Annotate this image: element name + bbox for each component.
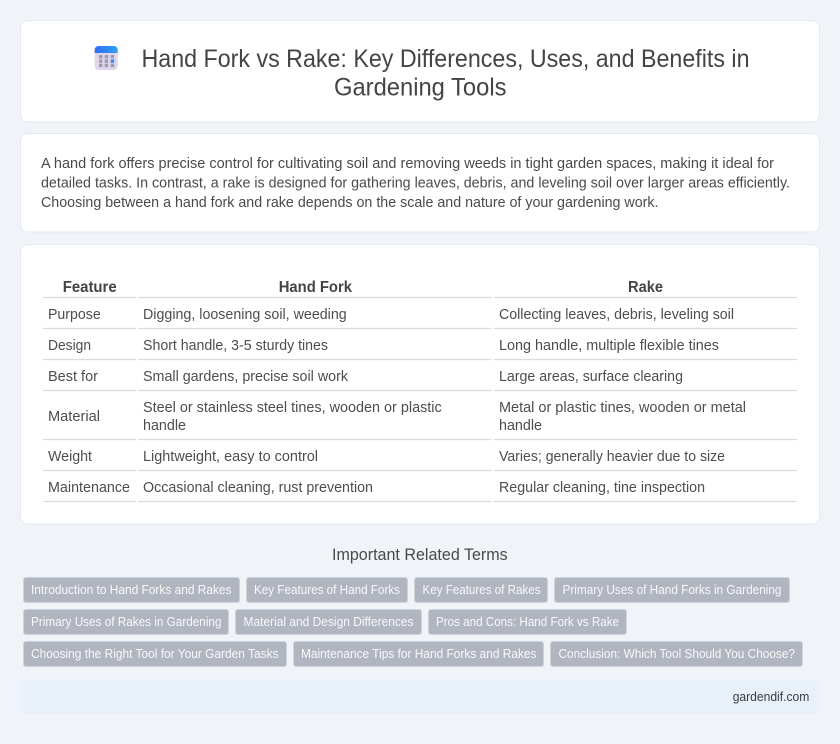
table header row (43, 279, 797, 298)
tag (24, 642, 286, 666)
footer (20, 680, 820, 714)
tag: Key Features of Rakes (422, 583, 540, 597)
footer site name: gardendif.com (733, 689, 809, 704)
row: purpose: Purpose (48, 307, 101, 323)
table header row: Feature (63, 279, 117, 296)
intro text: A hand fork offers precise control for cultivating soil and removing weeds in tight garden spaces, making it ideal for (41, 155, 774, 172)
row: best for: Best for (48, 369, 98, 385)
tag (294, 642, 544, 666)
row: purpose: Digging, loosening soil, weeding (143, 307, 347, 323)
panel: comparison table (20, 244, 820, 524)
tag (428, 610, 626, 634)
row: design (43, 338, 797, 360)
panel: introduction (20, 134, 820, 232)
row: material: Metal or plastic tines, wooden or metal (499, 400, 746, 416)
row: material: handle (143, 418, 186, 434)
row: maintenance: Regular cleaning, tine inspection (499, 480, 705, 496)
tag: Maintenance Tips for Hand Forks and Rakes (301, 647, 536, 661)
row: material (43, 400, 797, 440)
tag (414, 578, 548, 602)
tag (246, 578, 408, 602)
row: best for: Small gardens, precise soil work (143, 369, 349, 385)
tag: Material and Design Differences (244, 615, 414, 629)
title (142, 45, 750, 102)
tag: Primary Uses of Rakes in Gardening (31, 615, 222, 629)
tag: Conclusion: Which Tool Should You Choose? (558, 647, 795, 661)
icon: calendar (95, 46, 118, 70)
title: Hand Fork vs Rake: Key Differences, Uses, and Benefits in (142, 45, 750, 73)
row: weight: Lightweight, easy to control (143, 449, 318, 465)
row: material: handle (499, 418, 542, 434)
tag (554, 578, 790, 602)
tag (24, 610, 228, 634)
tag (236, 610, 422, 634)
table header row: Rake (628, 279, 663, 296)
panel: title header (20, 20, 820, 122)
row: best for (43, 369, 797, 390)
row: weight: Weight (48, 449, 92, 465)
related term tags (24, 578, 802, 666)
row: material: Steel or stainless steel tines, wooden or plastic (143, 400, 442, 416)
row: best for: Large areas, surface clearing (499, 369, 683, 385)
row: design: Long handle, multiple flexible tines (499, 338, 719, 354)
row: maintenance (43, 480, 797, 502)
row: weight: Varies; generally heavier due to size (499, 449, 725, 465)
tag: Pros and Cons: Hand Fork vs Rake (436, 615, 619, 629)
tag (24, 578, 240, 602)
tag: Key Features of Hand Forks (254, 583, 400, 597)
tag: Choosing the Right Tool for Your Garden Tasks (31, 647, 278, 661)
tag: Primary Uses of Hand Forks in Gardening (562, 583, 782, 597)
row: design: Short handle, 3-5 sturdy tines (143, 338, 328, 354)
tag (550, 642, 802, 666)
row: material: Material (48, 409, 100, 425)
intro text: detailed tasks. In contrast, a rake is designed for gathering leaves, debris, and leveling soil over larger areas efficiently. (41, 174, 790, 192)
row: design: Design (48, 338, 91, 354)
heading: related terms: Important Related Terms (332, 546, 508, 564)
row: maintenance: Maintenance (48, 480, 130, 496)
intro text (41, 155, 790, 211)
intro text: Choosing between a hand fork and rake depends on the scale and nature of your gardening work. (41, 194, 658, 211)
row: purpose (43, 307, 797, 328)
title: Gardening Tools (334, 74, 506, 102)
table header row: Hand Fork (279, 279, 352, 296)
tag: Introduction to Hand Forks and Rakes (31, 583, 232, 597)
row: weight (43, 449, 797, 470)
row: maintenance: Occasional cleaning, rust prevention (143, 480, 373, 496)
row: purpose: Collecting leaves, debris, leveling soil (499, 307, 734, 323)
